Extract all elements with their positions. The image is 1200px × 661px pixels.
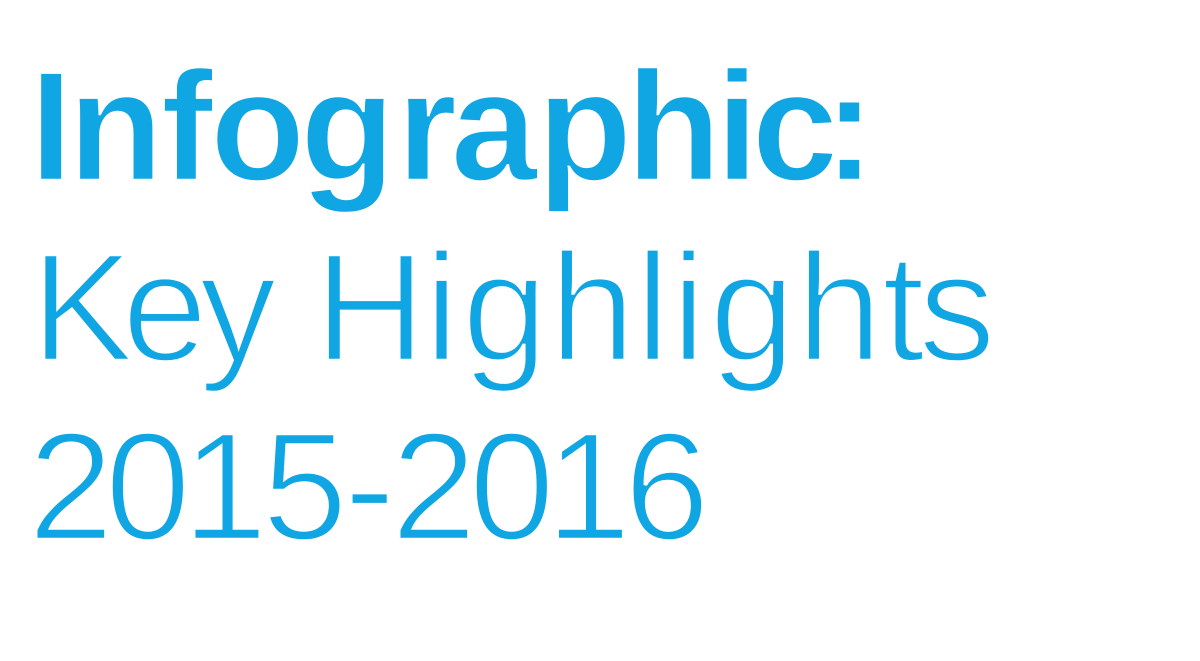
subheading: Key Highlights: Key Highlights (31, 222, 996, 394)
heading: Infographic: Infographic: (30, 40, 875, 214)
subheading: years: 2015-2016 (28, 400, 710, 572)
